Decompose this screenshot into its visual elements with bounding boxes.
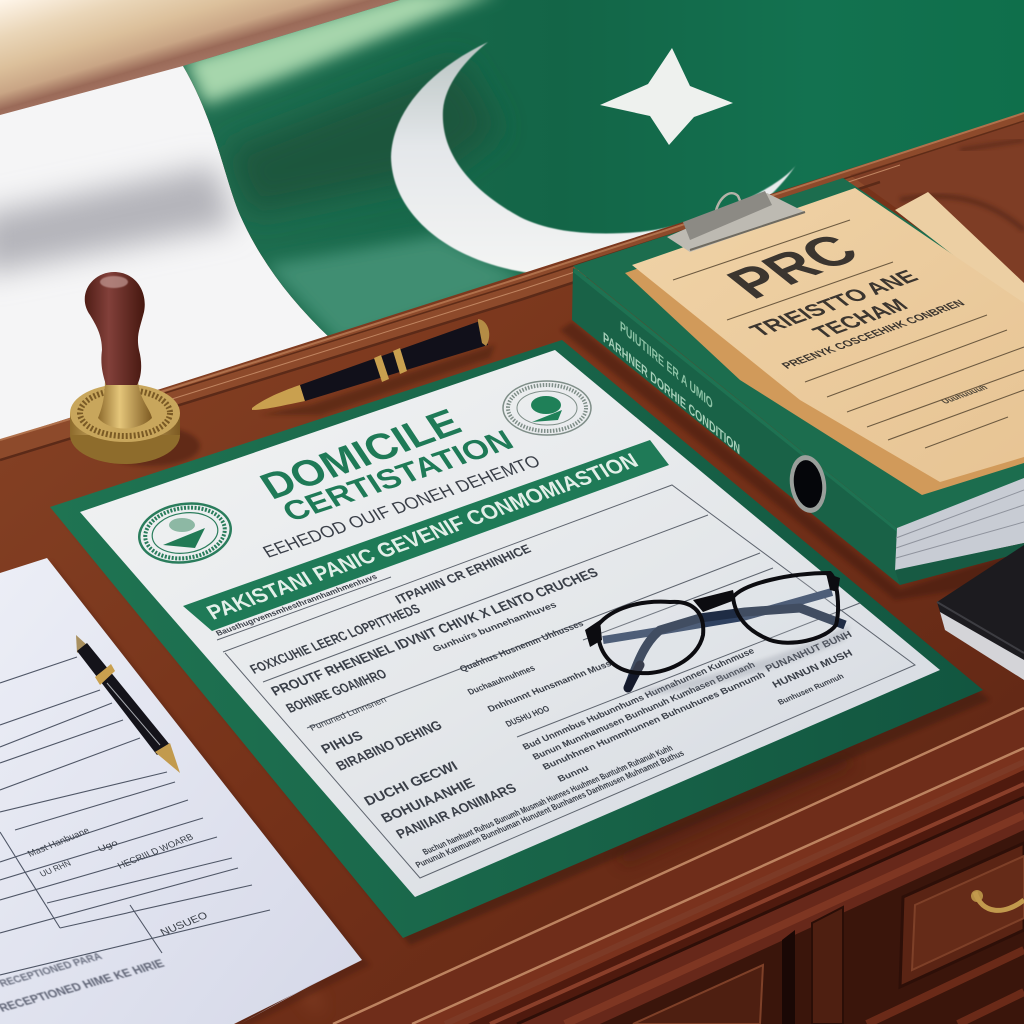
stamp handle highlight xyxy=(100,276,128,288)
form frame and rules xyxy=(217,485,915,878)
green binder xyxy=(560,178,1024,600)
glasses bridge xyxy=(693,590,735,612)
paper main sheet xyxy=(632,188,1024,482)
stamp wood handle xyxy=(85,272,145,385)
paper rules xyxy=(673,220,1024,448)
form text: DUSHU HOO xyxy=(504,704,551,729)
green band xyxy=(183,440,669,631)
glasses arm tip xyxy=(628,665,640,688)
form text: FOXXCUHIE LEERC LOPPITTHEDS xyxy=(247,601,423,676)
pen on paper xyxy=(76,635,180,773)
form text: Pununuh Kanmunen Bunnhuman Hunutent Bunhames Danhmusen Muhnamnt Buthus xyxy=(414,748,686,870)
stamp shadow xyxy=(100,426,200,466)
small note: Uuuhuuuuh xyxy=(939,383,990,405)
desk front roll moulding xyxy=(333,708,1024,1024)
flag green field xyxy=(180,0,1024,345)
form text: Bausthugrvemsmhesthrannhamhmenhuvs xyxy=(214,572,379,638)
form text: PUNANHUT BUNH xyxy=(764,629,854,674)
stamp base xyxy=(70,406,180,464)
subheading line 1: TRIEISTTO ANE xyxy=(744,266,924,340)
pen barrel xyxy=(300,321,488,401)
left paper form: RECEPTIONED HIME KE HIRIE xyxy=(0,957,167,1014)
drawer front upper right xyxy=(900,843,1024,987)
left paper form: NUSUEO xyxy=(158,910,210,938)
form labels: Mast Hanbuane xyxy=(26,826,92,859)
pen gold tip xyxy=(252,385,305,410)
binder pages xyxy=(895,478,1024,571)
form lines xyxy=(0,657,270,975)
blurred form text: RECEPTIONED PARA xyxy=(0,950,105,989)
spine text line 1: PUIUTIIRE ER A UMIO xyxy=(620,317,713,412)
desk back moulding xyxy=(0,113,1024,460)
seal right xyxy=(503,381,591,435)
drawer front lower xyxy=(633,965,763,1024)
flag of Pakistan xyxy=(0,0,1024,450)
desk top right wood grain xyxy=(850,122,1024,300)
glasses temple front xyxy=(628,608,845,688)
band text: PAKISTANI PANIC GEVENIF CONMOMIASTION xyxy=(202,449,643,624)
subtitle: EEHEDOD OUIF DONEH DEHEMTO xyxy=(259,452,544,561)
form text: Bunhusen Rumnuh xyxy=(776,672,846,707)
desk moulding highlights xyxy=(333,708,1024,1024)
spine text line 2: PARHNER DORHIE CONDITION xyxy=(603,328,740,458)
form text: Bud Unmmbus Hubunnhums Humnahunnen Kuhnmuse xyxy=(521,646,756,752)
paper shadow xyxy=(50,560,370,1024)
form text: PIHUS xyxy=(318,728,366,756)
form text: HUNNUN MUSH xyxy=(771,648,855,690)
glasses temple back xyxy=(603,592,832,640)
binder bottom cover xyxy=(895,543,1024,585)
black notebook xyxy=(937,545,1024,680)
flag crescent xyxy=(391,42,796,275)
form text: Bunnu xyxy=(556,763,591,784)
glasses shadow xyxy=(640,625,850,695)
form text: Gunhuirs bunnehamhuves xyxy=(431,600,558,654)
certificate shadow xyxy=(60,348,990,945)
form text xyxy=(214,541,855,870)
form text: PROUTF RHENENEL IDVNIT CHIVK X LENTO CRUCHES xyxy=(268,564,601,698)
subheading line 2: TECHAM xyxy=(807,295,913,342)
title: certistation: CERTISTATION xyxy=(277,425,520,528)
paper under layer xyxy=(625,195,1024,495)
lens right xyxy=(733,573,838,643)
pen shadow xyxy=(260,345,495,415)
form text: BIRABINO DEHING xyxy=(333,717,445,773)
lower right mouldings xyxy=(867,950,1024,1024)
main certificate xyxy=(50,340,990,945)
form text: BOHUIAANHIE xyxy=(378,775,477,825)
flag white stripe xyxy=(0,60,340,450)
left paper form xyxy=(0,558,370,1024)
form text: Bunun Munnhamusen Bunhunuh Kumhasen Bunnanh xyxy=(531,660,757,762)
form text: PANIIAIR AONIMARS xyxy=(393,780,519,841)
form text: Pununed Lunnsnen xyxy=(308,695,388,733)
binder ring hole xyxy=(786,453,830,515)
binder spine xyxy=(572,268,900,585)
form text: Bunuhhnen Hummhunnen Buhnuhunes Bunnumh xyxy=(541,670,767,772)
form text: Quahhus Husnemm Uhhusses xyxy=(458,619,585,674)
tan clipboard paper xyxy=(625,188,1024,495)
frame ends xyxy=(585,620,602,647)
pen on desk xyxy=(252,319,495,415)
form text: BOHNRE GOAMHRO xyxy=(283,666,389,715)
stamp xyxy=(70,272,200,466)
green folder xyxy=(50,340,983,938)
form text: ITPAHIIN CR ERHINHICE xyxy=(392,541,534,606)
drawer brass handle xyxy=(971,890,1024,910)
heading PRC: PRC xyxy=(713,225,872,307)
paper sheet xyxy=(0,558,362,1024)
form text: Duchaauhnuhmes xyxy=(466,663,537,697)
eyeglasses xyxy=(585,573,850,695)
left paper form: HECRIILD WOARB xyxy=(116,832,196,871)
flag star xyxy=(600,48,733,145)
binder shadow xyxy=(560,322,1024,600)
left paper form: UU RHN xyxy=(38,858,73,879)
back paper sheet xyxy=(895,192,1024,310)
lens left xyxy=(598,602,703,673)
form text: Buchun hamhunt Ruhus Bunumh Musmah Hunnes Huuhmen Buntuhm Ruhanuh Kuhh xyxy=(421,743,675,857)
seal left xyxy=(135,498,235,568)
form text: Dnhhunnt Hunsmamhn Muss xyxy=(486,659,613,714)
left paper form: Ugo xyxy=(96,838,120,854)
fine print: PREENYK COSCEEHIHK CONBRIEN xyxy=(778,298,968,371)
background: blurred wall xyxy=(0,0,420,125)
desk column xyxy=(812,907,843,1024)
metal clip xyxy=(667,191,805,252)
form text: DUCHI GECWI xyxy=(361,758,460,808)
white sheet xyxy=(80,350,940,897)
title: domicile: DOMICILE xyxy=(253,402,469,507)
stamp collar xyxy=(98,378,152,428)
binder top cover xyxy=(573,178,1024,528)
